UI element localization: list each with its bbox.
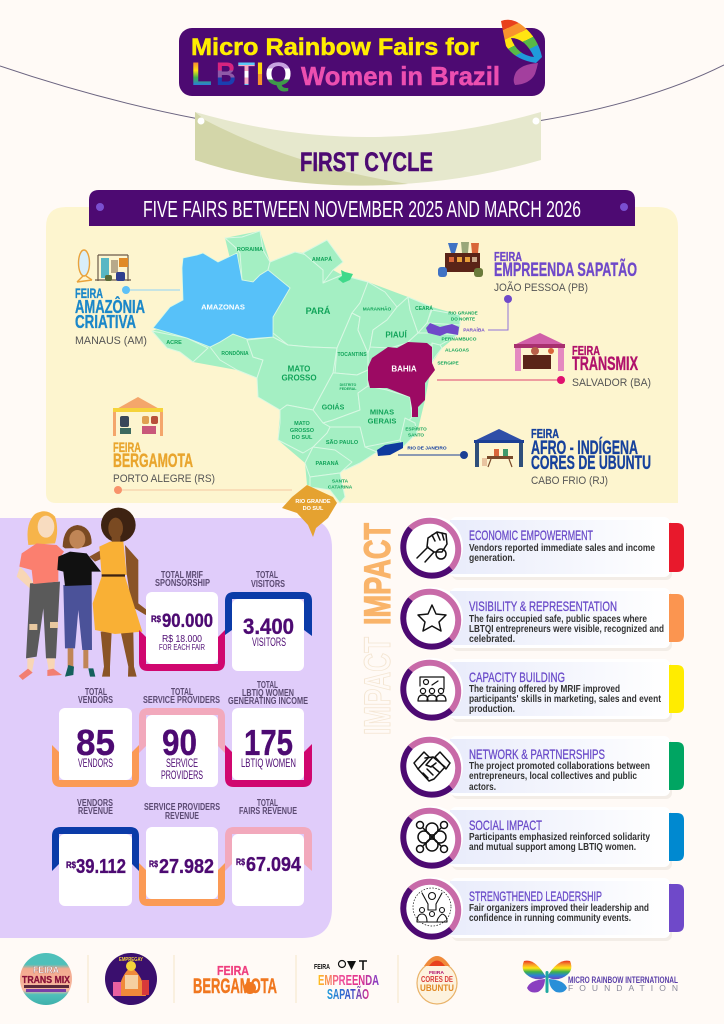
vertical heading: impact: IMPACT — [357, 523, 398, 625]
stat: total MRIF sponsorship: R$ 18.000 — [162, 633, 202, 645]
ring — [401, 735, 463, 797]
logo: Cores de Ubuntu — [417, 956, 457, 1004]
title line one: Micro Rainbow Fairs for — [191, 34, 479, 61]
stat: total fairs revenue: R$ — [236, 857, 245, 867]
state names: DISTRITO — [340, 383, 357, 387]
highlighted state: Rio de Janeiro — [377, 442, 403, 456]
state names: AMAPÁ — [312, 256, 332, 263]
stat label: TOTAL — [85, 686, 107, 698]
stat: service providers revenue: 27.982 — [159, 856, 214, 878]
state names: SANTO — [408, 432, 424, 438]
stat: total MRIF sponsorship: 90.000 — [162, 611, 213, 632]
logo: Cores de Ubuntu: FEIRA — [429, 970, 445, 975]
panel: map background — [46, 207, 678, 503]
butterfly — [523, 961, 571, 993]
description — [469, 684, 661, 715]
fair name: AMAZÔNIA — [75, 296, 145, 317]
stat label: TOTAL — [171, 686, 193, 698]
connector — [114, 486, 292, 494]
stat label — [251, 569, 285, 590]
stat label: FAIRS REVENUE — [239, 805, 297, 817]
description: celebrated. — [469, 634, 515, 645]
description: actors. — [469, 782, 496, 793]
stat label — [143, 686, 220, 706]
stat: vendors revenue — [52, 797, 139, 906]
stat: vendors revenue: 39.112 — [76, 856, 126, 878]
fair name: FEIRA — [531, 426, 559, 441]
state names: GERAIS — [368, 416, 396, 426]
description: production. — [469, 704, 515, 715]
connector — [488, 295, 512, 330]
state names: SÃO PAULO — [326, 439, 359, 446]
fair name: TRANSMIX — [572, 354, 638, 375]
state names: CEARÁ — [415, 305, 433, 312]
description — [469, 614, 664, 645]
description: participants' skills in marketing, sales and event — [469, 694, 661, 705]
state names: MATO — [288, 364, 310, 374]
state names: GROSSO — [290, 428, 315, 434]
state names: DO SUL — [292, 435, 313, 441]
logo: Micro Rainbow International Foundation: MICRO RAINBOW INTERNATIONAL — [568, 975, 678, 986]
LBTIQ pride lettering: I — [256, 56, 264, 92]
vertical heading: impact — [357, 523, 398, 735]
state names: BAHIA — [391, 364, 417, 374]
title: ECONOMIC EMPOWERMENT — [469, 527, 593, 543]
stat: total vendors: VENDORS — [78, 756, 113, 770]
state names: RIO DE JANEIRO — [407, 446, 447, 452]
stat label: TOTAL MRIF — [161, 569, 203, 581]
state names: RIO GRANDE — [448, 310, 478, 316]
stat: total vendors — [52, 686, 139, 787]
icon: pink market stall — [514, 333, 565, 371]
hanging ropes — [0, 65, 724, 121]
map of Brazil — [152, 231, 485, 537]
icon: connected puzzle network — [416, 822, 448, 852]
fair: Amazônia Criativa — [75, 250, 180, 347]
footer dividers — [88, 955, 398, 1003]
fair name — [531, 426, 651, 474]
logo: Empreenda Feira Amazônia Criativa — [105, 953, 157, 1005]
stat: total LBTIQ women generating income: LBTIQ WOMEN — [241, 756, 296, 770]
stat label — [77, 797, 113, 817]
ring — [401, 516, 463, 578]
stat: total fairs revenue — [225, 797, 312, 906]
state names: RONDÔNIA — [221, 349, 249, 357]
title banner — [179, 20, 545, 96]
impact card: network and partnerships — [401, 735, 684, 799]
description: generation. — [469, 553, 515, 564]
logo: Micro Rainbow International Foundation — [523, 961, 678, 993]
city: JOÃO PESSOA (PB) — [494, 281, 588, 294]
states — [152, 231, 460, 503]
state names — [166, 247, 485, 512]
logo: Feira Trans Mix — [20, 953, 72, 1005]
fair name: AFRO - INDÍGENA — [531, 437, 638, 459]
stat: total vendors: 85 — [76, 722, 115, 763]
description: LBTQI entrepreneurs were visible, recognized and — [469, 624, 664, 635]
icon: mirror and clothes rack — [77, 250, 131, 282]
stat: total visitors: 3.400 — [243, 614, 294, 639]
description — [469, 832, 650, 853]
logo: Feira Empreenda Sapatão: FEIRA — [314, 964, 330, 971]
icon: leader with group — [413, 888, 451, 926]
description: confidence in running community events. — [469, 913, 631, 924]
stat: total service providers — [139, 686, 225, 787]
stat: total service providers: PROVIDERS — [161, 768, 203, 782]
state names: CATARINA — [328, 484, 353, 490]
stat label — [239, 797, 297, 817]
description — [469, 543, 655, 564]
impact card: visibility and representation — [401, 587, 684, 651]
stat label: TOTAL — [256, 569, 278, 581]
stat: total visitors — [225, 569, 312, 671]
stat label: SERVICE PROVIDERS — [144, 801, 220, 813]
logo: Feira Empreenda Sapatão: EMPREENDA — [318, 972, 379, 989]
description: entrepreneurs, local collectives and public — [469, 771, 637, 782]
state names: RORAIMA — [237, 247, 263, 253]
fair name: CORES DE UBUNTU — [531, 453, 651, 474]
logo: Feira Bergamota: BERGAMOTA — [193, 975, 277, 998]
stat: total visitors: VISITORS — [252, 635, 286, 649]
stat label: VENDORS — [78, 694, 113, 706]
LBTIQ pride lettering: L — [191, 56, 212, 92]
woman two — [57, 525, 101, 677]
state names: DO SUL — [303, 506, 324, 512]
highlighted state: Paraíba — [426, 323, 459, 336]
fair name — [494, 249, 637, 281]
logo: Feira Bergamota: FEIRA — [217, 963, 250, 978]
stat: total MRIF sponsorship: FOR EACH FAIR — [159, 642, 205, 652]
fair name: FEIRA — [572, 343, 600, 358]
icon: classroom presentation — [418, 677, 446, 701]
state names: PARANÁ — [315, 460, 339, 467]
connector — [122, 286, 180, 294]
state names: PARAÍBA — [463, 326, 485, 334]
city: PORTO ALEGRE (RS) — [113, 473, 215, 485]
title: STRENGTHENED LEADERSHIP — [469, 888, 602, 904]
stat label: SPONSORSHIP — [155, 577, 210, 589]
state names: AMAZONAS — [201, 302, 245, 312]
title: VISIBILITY & REPRESENTATION — [469, 598, 617, 614]
woman one — [17, 511, 64, 680]
LBTIQ pride lettering: T — [238, 56, 255, 92]
ribbon: first cycle — [195, 112, 541, 186]
icon: blue market stall — [474, 429, 524, 467]
title: SOCIAL IMPACT — [469, 817, 542, 833]
state names: MATO — [294, 421, 311, 427]
description: The fairs occupied safe, public spaces where — [469, 614, 647, 625]
stat: total MRIF sponsorship — [139, 569, 225, 671]
title line two: Women in Brazil — [301, 61, 500, 91]
state names: TOCANTINS — [337, 352, 367, 358]
stat: total LBTIQ women generating income — [225, 679, 312, 787]
map silhouette — [152, 231, 460, 503]
impact card: economic empowerment — [401, 516, 684, 580]
icon: raised fist with coin — [417, 532, 447, 562]
state names: ALAGOAS — [445, 348, 470, 354]
description — [469, 761, 650, 793]
logo: Feira Empreenda Sapatão: SAPATÃO — [327, 985, 369, 1003]
logo: Empreenda Feira Amazônia Criativa: EMPREGAY — [119, 957, 144, 963]
fair name — [75, 285, 145, 332]
state names: RIO GRANDE — [295, 499, 331, 505]
ring — [401, 587, 463, 649]
stat label — [144, 801, 220, 822]
stat label: REVENUE — [165, 810, 199, 822]
stat label: VISITORS — [251, 578, 285, 590]
connector — [437, 376, 565, 384]
state names: PERNAMBUCO — [442, 336, 477, 342]
stat label: REVENUE — [78, 805, 113, 817]
connector — [398, 451, 468, 459]
stat: service providers revenue: R$ — [149, 859, 158, 869]
stat label: GENERATING INCOME — [228, 695, 308, 707]
stat: vendors revenue: R$ — [66, 860, 76, 870]
highlighted state: Amazonas — [153, 253, 290, 347]
state names: MARANHÃO — [363, 306, 392, 312]
state names: SANTA — [332, 478, 349, 484]
stat label: VENDORS — [77, 797, 113, 809]
impact card: strengthened leadership — [401, 877, 684, 941]
fair name — [572, 343, 638, 375]
description: The training offered by MRIF improved — [469, 684, 620, 695]
fair name: FEIRA — [113, 439, 141, 455]
fair: Transmix — [437, 333, 651, 389]
fair: Afro-Indígena Cores de Ubuntu — [398, 426, 651, 487]
state names: DO NORTE — [451, 316, 475, 322]
state names: FEDERAL — [340, 387, 357, 391]
LBTIQ pride lettering: B — [216, 56, 236, 92]
state names: MINAS — [370, 408, 394, 416]
city: MANAUS (AM) — [75, 335, 147, 347]
logo: Feira Trans Mix: FEIRA — [33, 965, 59, 975]
fair name: FEIRA — [494, 249, 522, 264]
stat label: LBTIQ WOMEN — [242, 687, 294, 699]
icon: handshake — [414, 752, 450, 781]
stat label — [155, 569, 210, 589]
state names: PARÁ — [306, 306, 331, 316]
description: The project promoted collaborations between — [469, 761, 650, 772]
fair name: EMPREENDA SAPATÃO — [494, 259, 637, 281]
LBTIQ pride lettering — [191, 56, 292, 92]
stat label: TOTAL — [257, 679, 278, 691]
fair name: BERGAMOTA — [113, 451, 193, 472]
header bar: five fairs — [89, 190, 635, 226]
logo: Cores de Ubuntu: UBUNTU — [420, 983, 454, 993]
description: Participants emphasized reinforced solidarity — [469, 832, 650, 843]
stat label — [228, 679, 308, 707]
fair name — [113, 439, 193, 472]
state names: GOIÁS — [322, 402, 345, 412]
ring — [401, 806, 463, 868]
title: CAPACITY BUILDING — [469, 669, 565, 685]
vertical heading: impact: IMPACT — [357, 637, 398, 735]
impact card: capacity building — [401, 658, 684, 722]
stat: service providers revenue — [139, 801, 225, 906]
highlighted state: Bahia — [368, 342, 435, 417]
logo: Feira Empreenda Sapatão — [314, 960, 379, 1003]
city: CABO FRIO (RJ) — [531, 475, 608, 487]
highlighted state: Rio Grande do Sul — [282, 485, 337, 537]
illustration: three women — [17, 508, 149, 680]
fair name: CRIATIVA — [75, 312, 136, 332]
ring — [401, 877, 463, 939]
stat: total MRIF sponsorship: R$ — [151, 614, 161, 624]
stat label: TOTAL — [257, 797, 278, 809]
fair: Empreenda Sapatão — [438, 242, 637, 330]
heading: first cycle: FIRST CYCLE — [300, 147, 433, 177]
butterfly wing logo — [501, 20, 542, 85]
city: SALVADOR (BA) — [572, 377, 651, 389]
stat: total service providers: SERVICE — [166, 756, 198, 770]
logo: Feira Trans Mix: TRANS MIX — [22, 975, 70, 986]
stat: total LBTIQ women generating income: 175 — [244, 722, 293, 763]
panel: statistics background — [0, 518, 332, 938]
state names: ESPÍRITO — [405, 424, 427, 432]
state names: ACRE — [166, 340, 182, 346]
stat: total service providers: 90 — [162, 722, 197, 763]
stat label — [78, 686, 113, 706]
LBTIQ pride lettering: Q — [265, 56, 292, 92]
woman three — [89, 508, 149, 677]
description: Vendors reported immediate sales and income — [469, 543, 655, 554]
state names: SERGIPE — [437, 360, 459, 366]
description — [469, 903, 649, 924]
ring — [401, 658, 463, 720]
stat label: SERVICE PROVIDERS — [143, 694, 220, 706]
description: Fair organizers improved their leadership and — [469, 903, 649, 914]
stat: total fairs revenue: 67.094 — [246, 854, 302, 876]
logo: Cores de Ubuntu: CORES DE — [421, 975, 453, 984]
fair: Bergamota — [113, 397, 292, 494]
logo: Feira Bergamota — [193, 963, 277, 998]
impact card: social impact — [401, 806, 684, 870]
description: and mutual support among LBTIQ women. — [469, 842, 636, 853]
state names: PIAUÍ — [385, 330, 407, 340]
title: NETWORK & PARTNERSHIPS — [469, 746, 605, 762]
icon: star — [418, 605, 446, 631]
state names: GROSSO — [281, 374, 317, 382]
icon: pottery shelf — [438, 242, 483, 277]
logo: Micro Rainbow International Foundation: FOUNDATION — [568, 983, 678, 993]
icon: orange market stall — [113, 397, 163, 436]
fair name: FEIRA — [75, 285, 103, 301]
